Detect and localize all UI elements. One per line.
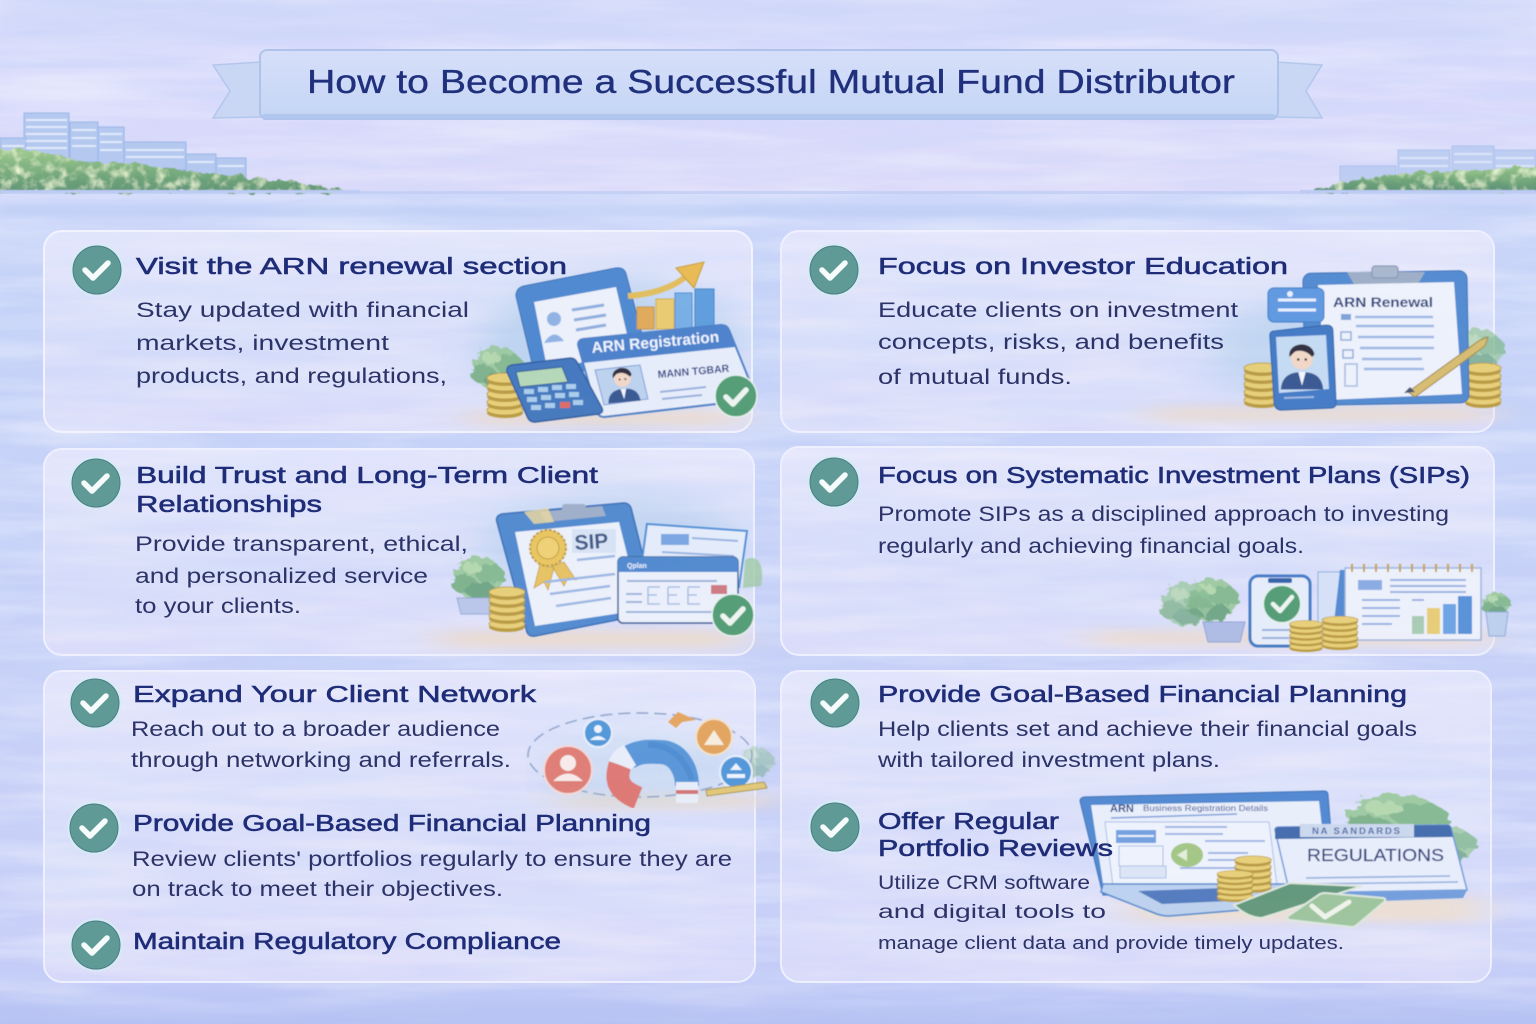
illustration: laptop, regulations window, coins and banknote: Business Registration Details: [1143, 803, 1268, 813]
body text: on track to meet their objectives.: [132, 878, 503, 901]
body text: [878, 299, 1238, 389]
heading: Maintain Regulatory Compliance: [133, 928, 561, 954]
illustration: ARN Renewal clipboard, phone, pen and coins: ARN Renewal: [1333, 295, 1433, 310]
skyline and hills: left: [0, 113, 360, 198]
body text: Educate clients on investment: [878, 299, 1238, 322]
body text: [878, 503, 1449, 558]
illustration: laptop, regulations window, coins and banknote: REGULATIONS: [1307, 845, 1444, 865]
heading: Expand Your Client Network: [133, 681, 537, 707]
heading: Offer Regular: [878, 808, 1059, 834]
body text: Review clients' portfolios regularly to ensure they are: [132, 848, 732, 871]
illustration: ARN registration card, tablet, calculator and chart: ARN Registration: [591, 329, 720, 357]
title: How to Become a Successful Mutual Fund Distributor: [307, 63, 1235, 100]
illustration: laptop, regulations window, coins and banknote: NA SANDARDS: [1312, 826, 1400, 837]
body text: through networking and referrals.: [131, 749, 511, 772]
panel: Expand network, goal planning and compliance: [44, 671, 774, 982]
heading: Portfolio Reviews: [878, 835, 1113, 861]
body text: [877, 718, 1417, 772]
icon: check: [69, 918, 123, 972]
illustration: ARN Renewal clipboard, phone, pen and coins: [1244, 266, 1504, 410]
heading: Relationships: [136, 491, 322, 517]
illustration: ARN registration card, tablet, calculator and chart: [470, 262, 757, 422]
body text: [131, 718, 511, 772]
body text: markets, investment: [136, 332, 389, 355]
body text: and personalized service: [135, 565, 428, 588]
icon: check: [70, 243, 124, 297]
icon: check: [807, 455, 861, 509]
panel: Goal planning, portfolio reviews and digital tools: [781, 671, 1491, 982]
body text: regularly and achieving financial goals.: [878, 535, 1304, 558]
heading: Provide Goal-Based Financial Planning: [133, 810, 651, 836]
heading: [136, 462, 599, 517]
panel: Visit the ARN renewal section: [44, 231, 757, 432]
icon: check: [808, 800, 862, 854]
skyline and hills: right: [1300, 146, 1536, 193]
heading: Build Trust and Long-Term Client: [136, 462, 599, 488]
illustration: laptop, regulations window, coins and banknote: ARN: [1110, 803, 1134, 815]
body text: Provide transparent, ethical,: [135, 533, 468, 556]
body text: and digital tools to: [878, 902, 1106, 923]
body text: [132, 848, 732, 901]
body text: manage client data and provide timely updates.: [878, 933, 1344, 953]
body text: concepts, risks, and benefits: [878, 331, 1224, 354]
body text: [878, 873, 1344, 953]
icon: check: [807, 243, 861, 297]
body text: Reach out to a broader audience: [131, 718, 500, 741]
body text: Stay updated with financial: [136, 299, 469, 322]
heading: Provide Goal-Based Financial Planning: [878, 681, 1407, 707]
heading: Focus on Systematic Investment Plans (SIPs): [878, 462, 1470, 488]
illustration: SIP certificate, window and coins: SIP: [574, 530, 609, 555]
icon: check: [67, 801, 121, 855]
panel: Focus on Investor Education: [781, 231, 1504, 432]
body text: Help clients set and achieve their financial goals: [878, 718, 1417, 741]
body text: Utilize CRM software: [878, 873, 1090, 894]
illustration: client network magnet: [528, 712, 774, 803]
body text: [136, 299, 469, 388]
heading: [878, 808, 1113, 861]
icon: check: [808, 676, 862, 730]
heading: Focus on Investor Education: [878, 253, 1288, 279]
title ribbon banner: [213, 50, 1322, 120]
icon: check: [69, 456, 123, 510]
body text: products, and regulations,: [136, 365, 447, 388]
panel: Focus on Systematic Investment Plans: [781, 447, 1510, 655]
panel: Build Trust and Long-Term Client Relationships: [44, 449, 762, 655]
illustration: ARN registration card, tablet, calculator and chart: MANN TGBAR: [657, 363, 730, 381]
body text: [135, 533, 468, 618]
illustration: laptop, regulations window, coins and banknote: [1080, 791, 1476, 927]
body text: to your clients.: [135, 595, 301, 618]
body text: Promote SIPs as a disciplined approach to investing: [878, 503, 1449, 526]
illustration: SIP certificate, window and coins: [451, 503, 762, 636]
heading: Visit the ARN renewal section: [136, 253, 567, 279]
icon: check: [68, 676, 122, 730]
body text: of mutual funds.: [878, 366, 1072, 389]
illustration: phone, calendar, coins and plants: [1159, 564, 1510, 652]
illustration: SIP certificate, window and coins: Qplan: [627, 563, 647, 570]
body text: with tailored investment plans.: [877, 749, 1220, 772]
